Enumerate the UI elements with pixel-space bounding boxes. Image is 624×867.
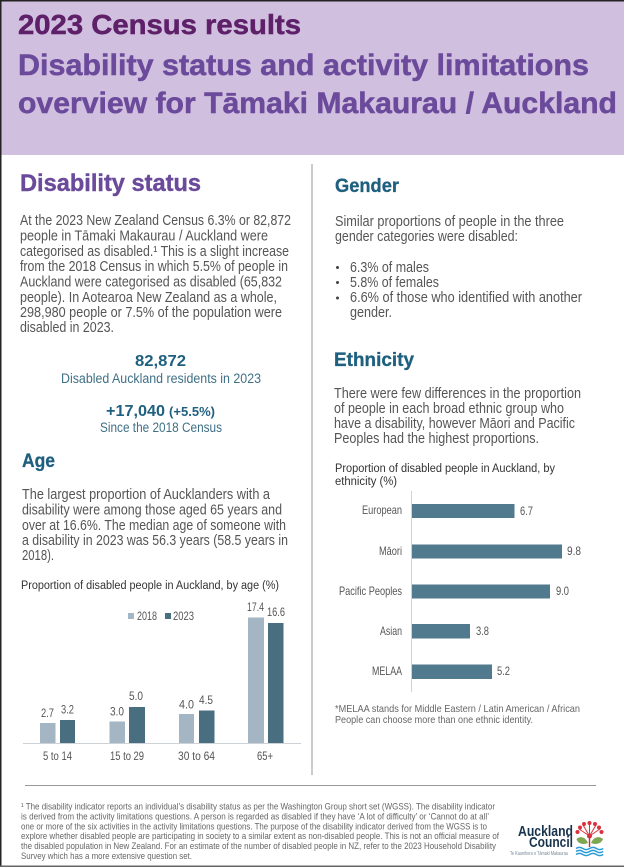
bar chart: ethnicity [339, 491, 581, 692]
text block: ethnicity summary: have a disability, however Māori and Pacific [334, 416, 575, 432]
chart title: age: Proportion of disabled people in Auckland, by age (%) [21, 580, 279, 592]
bar: Pacific Peoples [339, 584, 569, 598]
text block: disability status summary: categorised as disabled.¹ This is a slight increase [20, 244, 289, 260]
bar: European: European [362, 503, 402, 517]
footnote: explore whether disabled people are participating in society to a similar extent as non-disabled people. This is not an official measure of [21, 831, 499, 842]
list: gender proportions: 6.6% of those who identified with another [350, 290, 582, 306]
text block: ethnicity summary: There were few differences in the proportion [334, 386, 581, 402]
text block: disability status summary: people). In Aotearoa New Zealand as a whole, [20, 290, 277, 306]
bars: 30 to 64: 30 to 64 [178, 749, 215, 763]
subtitle [18, 49, 617, 120]
text block: disability status summary: 298,980 people or 7.5% of the population were [20, 305, 282, 321]
text block: disability status summary: At the 2023 New Zealand Census 6.3% or 82,872 [20, 213, 291, 229]
chart legend: 2018 [137, 609, 157, 623]
footnote: the disabled population in New Zealand. For an estimate of the number of disabled people in NZ, refer to the 2023 Household Disability [21, 841, 496, 852]
text block: age summary: 2018). [22, 548, 54, 564]
bars: 65+: 65+ [257, 749, 273, 763]
text block: ethnicity summary [334, 386, 581, 447]
bar: European: 6.7 [520, 504, 533, 518]
icon: pohutukawa flower [576, 821, 604, 847]
icon: water waves [576, 847, 603, 856]
bars: 65+: 16.6 [267, 605, 285, 619]
callout: change since 2018: (+5.5%) [169, 405, 215, 419]
callout: change since 2018: +17,040 [106, 403, 165, 420]
bar: MELAA: 5.2 [497, 664, 510, 678]
subtitle: overview for Tāmaki Makaurau / Auckland [18, 87, 617, 120]
bar: Māori: 9.8 [567, 544, 581, 558]
bars: 5 to 14: 5 to 14 [43, 749, 72, 763]
header band [1, 1, 624, 155]
callout: disabled residents 2023: Disabled Auckland residents in 2023 [61, 371, 261, 386]
title: 2023 Census results [18, 9, 301, 40]
bars: 5 to 14 [40, 702, 75, 763]
panel: gender [335, 176, 582, 321]
footnote: Survey which has a more extensive question set. [21, 851, 192, 862]
bar: Pacific Peoples: 9.0 [556, 584, 569, 598]
list: gender proportions: 6.3% of males [350, 260, 429, 276]
text block: ethnicity summary: Peoples had the highest proportions. [334, 431, 539, 447]
text block: gender intro [335, 214, 564, 245]
heading: gender: Gender [335, 176, 400, 197]
callout: change since 2018 [100, 403, 222, 435]
text block: gender intro: Similar proportions of people in the three [335, 214, 564, 230]
bars: 30 to 64: 4.0 [179, 698, 194, 712]
heading: ethnicity: Ethnicity [334, 350, 414, 371]
chart title: ethnicity: ethnicity (%) [335, 476, 397, 488]
text block: disability status summary: people in Tāmaki Makaurau / Auckland were [20, 228, 268, 244]
panel: age [21, 451, 301, 763]
text block: ethnicity summary: of people in each broad ethnic group who [334, 401, 564, 417]
logo: Auckland Council: Council [529, 834, 573, 851]
bar: Asian: Asian [380, 624, 402, 638]
bars: 15 to 29: 5.0 [129, 689, 143, 703]
logo: Auckland Council: Te Kaunihera o Tāmaki Makaurau [510, 851, 568, 857]
text block: disability status summary: Auckland were categorised as disabled (65,832 [20, 274, 282, 290]
text block: age summary: a disability in 2023 was 56.3 years (58.5 years in [22, 533, 288, 549]
bar: MELAA: MELAA [372, 664, 402, 678]
list: gender proportions [336, 260, 582, 321]
bar: Asian [380, 624, 489, 638]
bar chart: age [23, 600, 301, 763]
text block: age summary [22, 487, 288, 564]
chart title: ethnicity [335, 463, 555, 488]
text block: gender intro: gender categories were disabled: [335, 229, 518, 245]
panel: ethnicity [334, 350, 581, 726]
text block: disability status summary: disabled in 2023. [20, 320, 114, 336]
callout: change since 2018: Since the 2018 Census [100, 420, 222, 435]
bars: 65+: 17.4 [247, 600, 264, 614]
chart note: MELAA: People can choose more than one ethnic identity. [335, 714, 533, 726]
bar: Māori [379, 544, 581, 558]
footnote: is derived from the activity limitations questions. A person is regarded as disabled if they have ‘A lot of difficulty’ or ‘Cannot do at all’ [21, 812, 489, 822]
bars: 65+ [247, 600, 285, 763]
bar: Māori: Māori [379, 544, 402, 558]
heading: age: Age [22, 451, 55, 472]
bar: European [362, 503, 533, 518]
list: gender proportions: gender. [350, 305, 392, 321]
heading: disability status: Disability status [20, 170, 201, 197]
bar: MELAA [372, 664, 510, 679]
logo: Auckland Council: Auckland [518, 823, 573, 840]
bars: 5 to 14: 3.2 [61, 702, 74, 716]
logo: Auckland Council [510, 821, 604, 857]
bars: 15 to 29: 15 to 29 [110, 749, 144, 763]
text block: disability status summary [20, 213, 291, 336]
bar: Pacific Peoples: Pacific Peoples [339, 584, 402, 598]
chart legend [128, 609, 194, 623]
list: gender proportions: 5.8% of females [350, 275, 439, 291]
callout: disabled residents 2023: 82,872 [135, 353, 186, 370]
chart title: ethnicity: Proportion of disabled people in Auckland, by [335, 463, 555, 475]
chart legend: 2023 [173, 609, 194, 623]
text block: disability status summary: from the 2018 Census in which 5.5% of people in [20, 259, 288, 275]
bars: 5 to 14: 2.7 [41, 706, 54, 720]
chart note: MELAA: *MELAA stands for Middle Eastern / Latin American / African [335, 703, 580, 715]
bars: 30 to 64 [178, 693, 215, 763]
text block: age summary: over at 16.6%. The median age of someone with [22, 518, 286, 534]
panel: disability status [20, 170, 291, 435]
footnote [21, 802, 499, 862]
footnote: ¹ The disability indicator reports an individual’s disability status as per the Washington Group short set (WGSS). The disability indicator [21, 802, 495, 812]
callout: disabled residents 2023 [61, 353, 261, 386]
footnote: one or more of the six activities in the activity limitations questions. The purpose of the disability indicator derived from the WGSS is to [21, 822, 487, 832]
bars: 30 to 64: 4.5 [199, 693, 213, 707]
text block: age summary: disability were among those aged 65 years and [22, 502, 282, 518]
subtitle: Disability status and activity limitations [18, 49, 589, 82]
chart note: MELAA [335, 703, 580, 726]
bar: Asian: 3.8 [476, 624, 489, 638]
bars: 15 to 29: 3.0 [110, 704, 124, 718]
bars: 15 to 29 [110, 689, 145, 763]
text block: age summary: The largest proportion of Aucklanders with a [22, 487, 271, 503]
